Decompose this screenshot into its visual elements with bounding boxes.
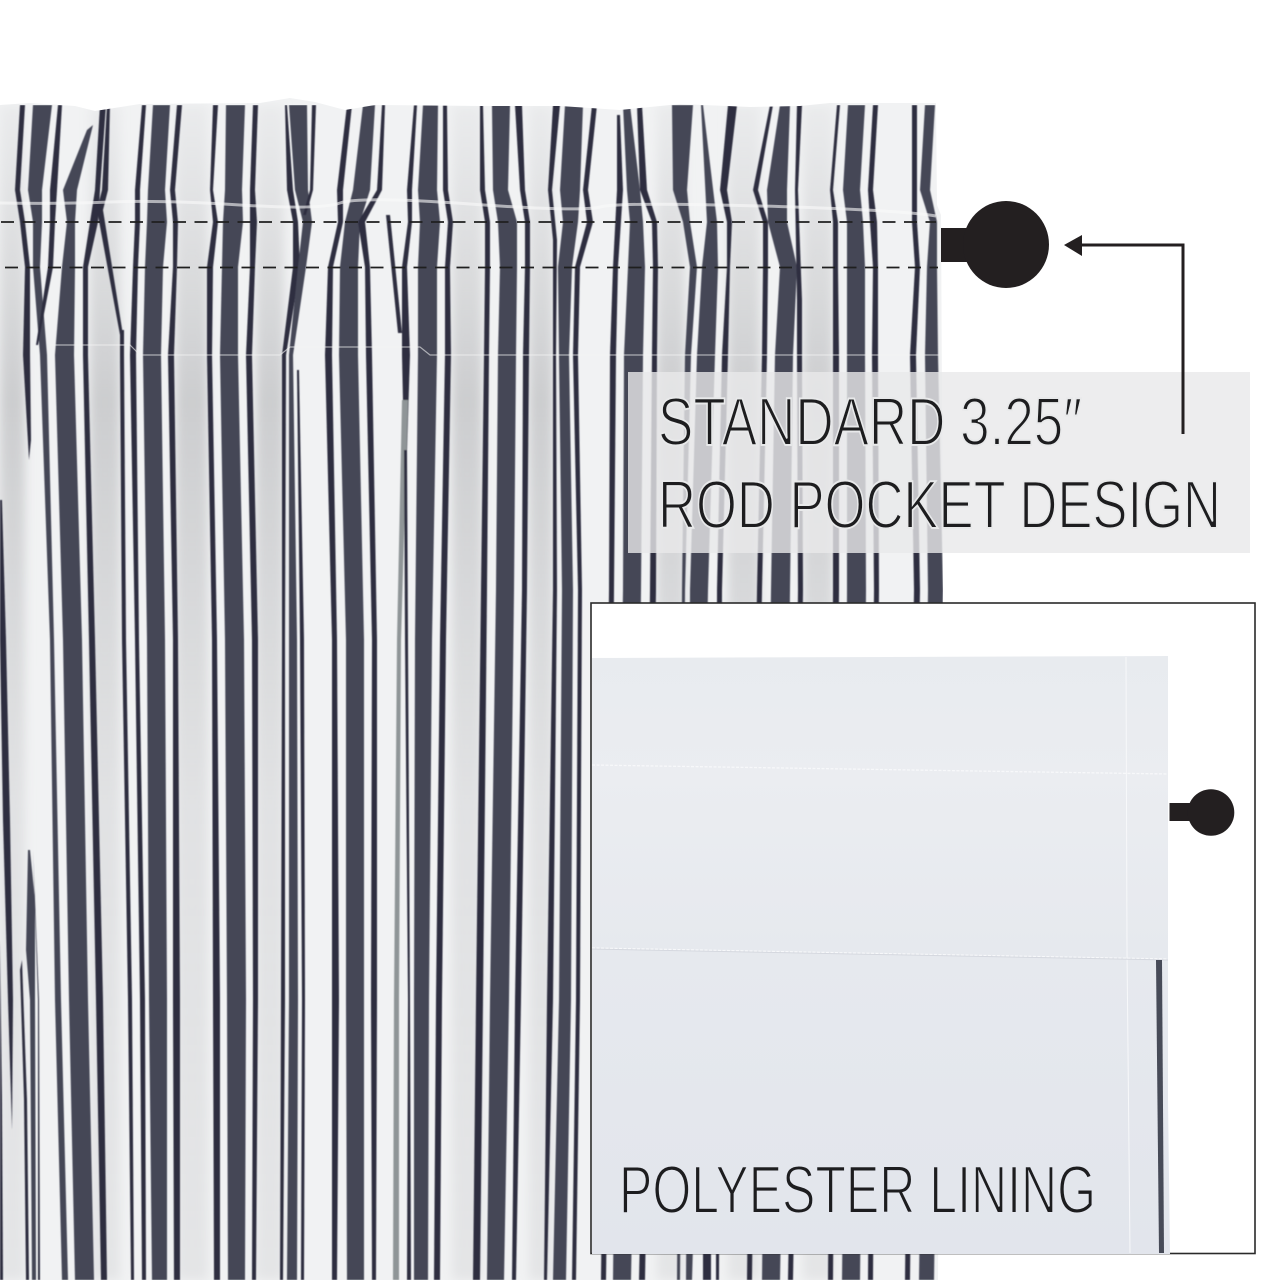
lining fabric [592,656,1170,1254]
lining stitching [592,657,1168,1253]
callout text: STANDARD 3.25″ [658,384,1082,460]
fabric fold shading [0,105,833,1280]
lining lower fold shadow [592,949,1168,960]
inset panel: polyester lining [591,603,1255,1254]
stripe group eight [601,105,658,1280]
callout: rod pocket label [628,372,1250,553]
striped curtain panel [0,95,950,1280]
callout text [658,384,1221,543]
stripe group eleven [828,105,879,1280]
stripe group twelve at curtain edge [905,105,943,1280]
left edge fold stripes [0,105,123,1280]
rod pocket gather seam [0,200,936,216]
lower hem stitch line [50,345,940,355]
stripe group five [393,105,453,1280]
stripe group nine [672,105,737,1280]
arrow: callout pointing to rod [1064,235,1183,434]
rod pocket dashed guide lines [1,222,938,268]
vertical ticking stripes [0,105,943,1280]
stripe group seven [544,105,597,1280]
stripe group three [207,105,258,1280]
stripe group six [473,105,530,1280]
fabric base [0,95,950,1280]
stripe group two [120,105,182,1280]
selvedge stripe [1156,960,1164,1253]
stripe group ten [747,105,803,1280]
inset frame [591,603,1255,1254]
lining label: POLYESTER LINING [619,1152,1096,1228]
stripe group four [280,105,402,1280]
callout background band [628,372,1250,553]
icon: small curtain rod end [1170,789,1234,836]
icon: curtain rod end [941,201,1049,288]
